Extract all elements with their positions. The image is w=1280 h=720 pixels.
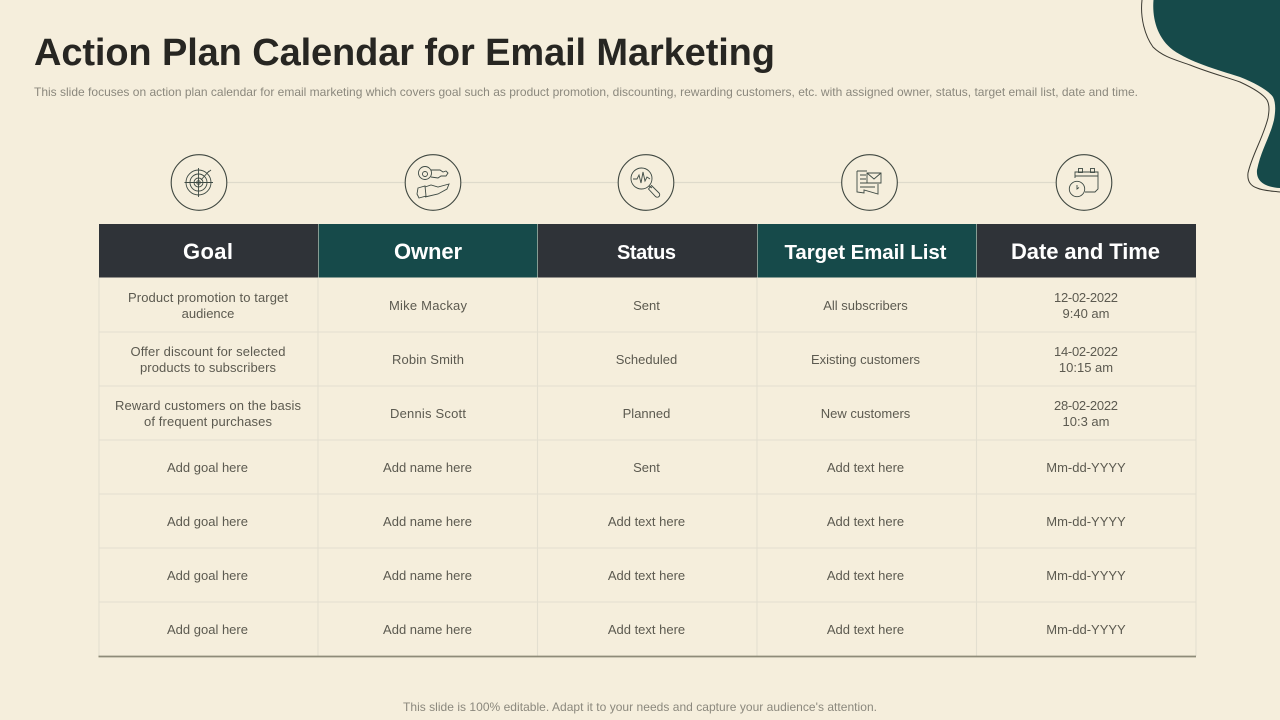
column: target email list: All subscribers <box>823 298 908 313</box>
table header row: Target Email List <box>784 241 947 264</box>
column: status: Add text here <box>608 568 685 583</box>
column: target email list: New customers <box>821 406 911 421</box>
table header row: Owner <box>394 239 462 264</box>
column: goal <box>115 290 302 637</box>
column: goal: Product promotion to target <box>128 290 288 305</box>
column: owner: Dennis Scott <box>390 406 466 421</box>
column: status: Add text here <box>608 514 685 529</box>
column: target email list: Existing customers <box>811 352 921 367</box>
column: status: Sent <box>633 460 660 475</box>
column: status: Planned <box>623 406 670 421</box>
title: Action Plan Calendar for Email Marketing <box>34 32 775 74</box>
column: date and time: 12-02-2022 <box>1054 290 1118 305</box>
column: status: Sent <box>633 298 660 313</box>
column: goal: audience <box>182 306 234 321</box>
subtitle: This slide focuses on action plan calendar for email marketing which covers goal such as product promotion, discounting, rewarding customers, etc. with assigned owner, status, target email list, date and time. <box>34 85 1138 99</box>
column: owner <box>383 298 472 637</box>
table header row: Goal <box>183 239 233 264</box>
column: goal: Add goal here <box>167 514 248 529</box>
column: owner: Add name here <box>383 622 472 637</box>
column: status: Add text here <box>608 622 685 637</box>
column: status <box>608 298 685 637</box>
decorative corner blob <box>1142 0 1280 192</box>
column: owner: Mike Mackay <box>389 298 468 313</box>
grid lines <box>99 278 1196 656</box>
icon row connector line <box>199 182 1084 184</box>
table header row <box>99 224 1196 278</box>
column: goal: Offer discount for selected <box>130 344 286 359</box>
icon: target <box>171 155 227 210</box>
column: date and time: 10:15 am <box>1059 360 1113 375</box>
column: goal: of frequent purchases <box>144 414 272 429</box>
column: date and time: 28-02-2022 <box>1054 398 1118 413</box>
column: goal: products to subscribers <box>140 360 276 375</box>
column: date and time <box>1046 290 1126 637</box>
column: target email list: Add text here <box>827 568 904 583</box>
column: date and time: Mm-dd-YYYY <box>1046 460 1126 475</box>
column: date and time: 10:3 am <box>1063 414 1109 429</box>
column: date and time: 9:40 am <box>1063 306 1109 321</box>
footer note: This slide is 100% editable. Adapt it to your needs and capture your audience's attention. <box>403 700 877 714</box>
table <box>98 224 1196 656</box>
column: date and time: 14-02-2022 <box>1054 344 1118 359</box>
column: goal: Add goal here <box>167 460 248 475</box>
icon: key and hand <box>405 155 461 210</box>
column: goal: Add goal here <box>167 568 248 583</box>
column: target email list: Add text here <box>827 460 904 475</box>
icon: calendar with clock <box>1056 155 1112 210</box>
column: date and time: Mm-dd-YYYY <box>1046 622 1126 637</box>
column: status: Scheduled <box>616 352 677 367</box>
icon: magnifier with pulse <box>618 155 674 210</box>
column: target email list: Add text here <box>827 622 904 637</box>
column: goal: Reward customers on the basis <box>115 398 302 413</box>
table header row: Date and Time <box>1011 239 1160 264</box>
column: owner: Add name here <box>383 568 472 583</box>
column: owner: Add name here <box>383 460 472 475</box>
icon: newsletter envelope <box>842 155 897 210</box>
column: owner: Robin Smith <box>392 352 464 367</box>
column: date and time: Mm-dd-YYYY <box>1046 568 1126 583</box>
column: target email list <box>811 298 921 637</box>
column: goal: Add goal here <box>167 622 248 637</box>
column: date and time: Mm-dd-YYYY <box>1046 514 1126 529</box>
table header row: Status <box>617 242 676 264</box>
column: owner: Add name here <box>383 514 472 529</box>
column: target email list: Add text here <box>827 514 904 529</box>
